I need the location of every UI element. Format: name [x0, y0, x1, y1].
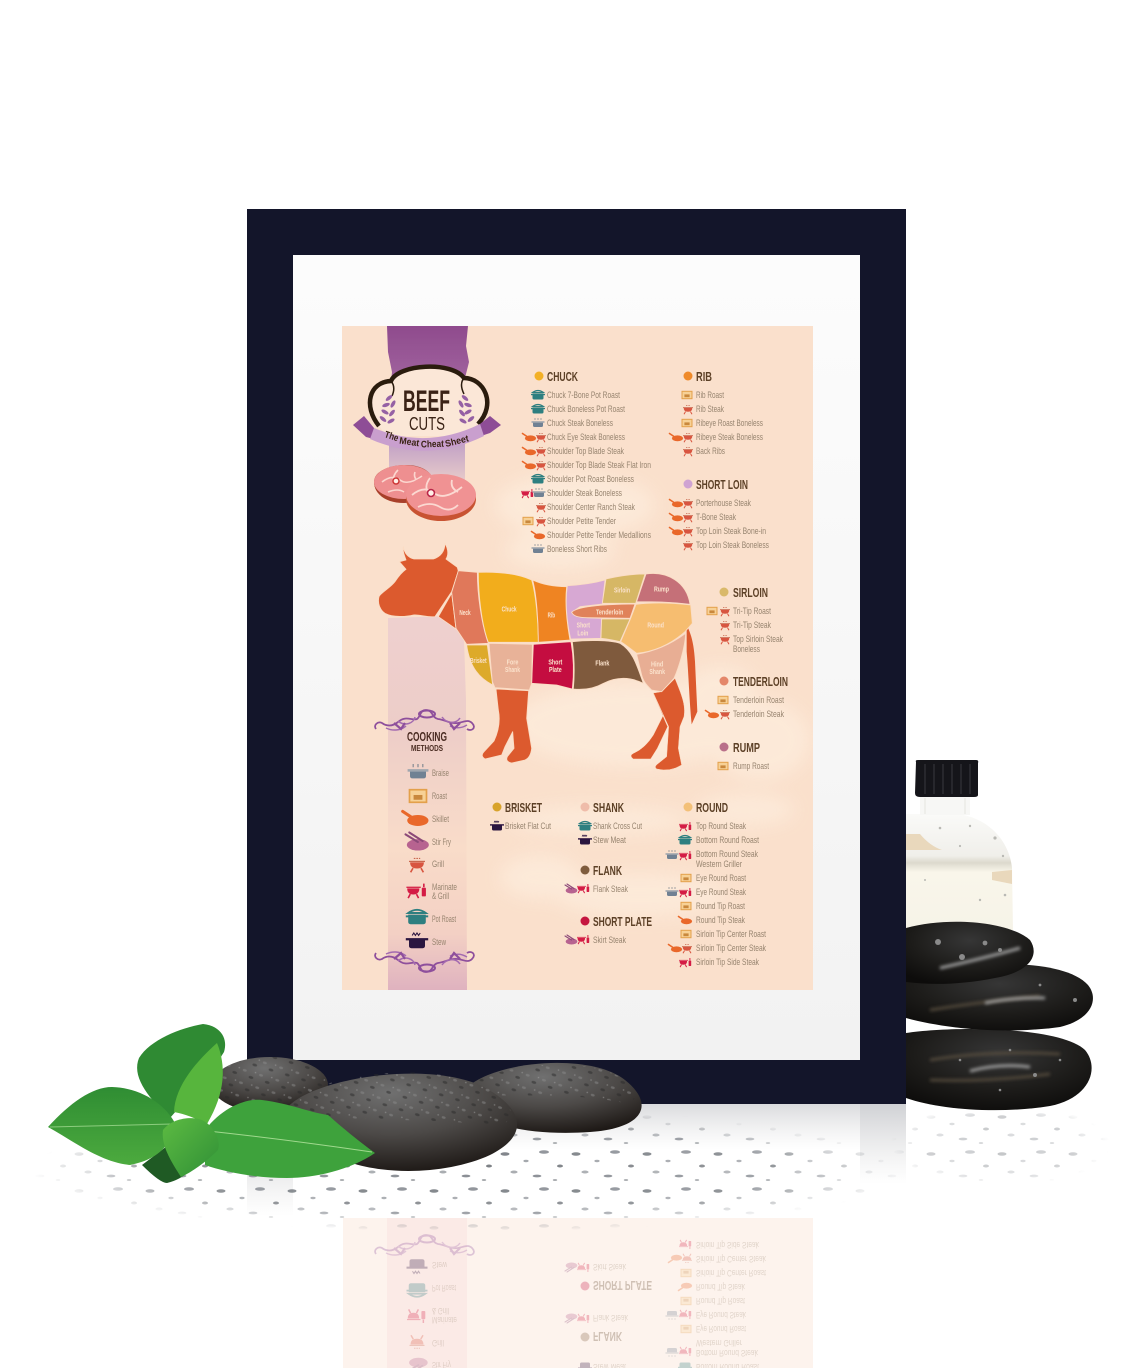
cut labels: Fore: [507, 657, 518, 666]
row: Ribeye Roast Boneless: [696, 418, 763, 429]
section: tenderloin: [706, 674, 788, 720]
row: Shoulder Top Blade Steak: [547, 446, 624, 457]
row: Shoulder Center Ranch Steak: [547, 502, 635, 513]
section: short loin: [670, 477, 769, 551]
cut labels: Shank: [649, 667, 666, 676]
ribbon text: [383, 429, 471, 450]
purple top band: [387, 326, 469, 392]
leaf: left: [48, 1087, 176, 1165]
row: Shank Cross Cut: [593, 821, 642, 832]
heading: shank: SHANK: [593, 800, 624, 815]
cow tail: [687, 625, 697, 724]
white mat: [293, 255, 860, 1060]
method: marinate and grill: Marinate: [432, 882, 457, 893]
leaf: small center: [163, 1118, 219, 1177]
short loin cut: [566, 580, 605, 639]
row: Sirloin Tip Side Steak: [696, 957, 759, 968]
row: Rib Steak: [696, 404, 724, 415]
section: sirloin: [707, 585, 783, 655]
row: Bottom Round Roast: [696, 835, 759, 846]
method: marinate and grill: [406, 882, 457, 902]
cut labels: Rump: [654, 585, 669, 594]
hind shank cut: [637, 633, 686, 692]
row: Chuck Boneless Pot Roast: [547, 404, 625, 415]
sirloin cut: [601, 574, 645, 642]
method: pot roast: [406, 910, 456, 925]
neck cut: [452, 571, 488, 644]
ribbon text: Cheat: [421, 439, 445, 450]
reflection of the poster: Stew: [432, 1259, 447, 1270]
cut labels: Short: [548, 658, 563, 667]
reflection of the poster: Sirloin Tip Side Steak: [696, 1239, 759, 1250]
method: stew: Stew: [432, 937, 446, 948]
row: Eye Round Steak: [696, 887, 746, 898]
CUTS: CUTS: [409, 414, 445, 434]
row: Top Round Steak: [696, 821, 746, 832]
cow diagram: [379, 543, 697, 770]
row: Chuck Steak Boneless: [547, 418, 613, 429]
bottle cap: [915, 760, 978, 797]
water droplets on table: [43, 1113, 1103, 1230]
method: roast: [410, 790, 447, 802]
ribbon text: Sheet: [444, 433, 471, 450]
row: [522, 432, 625, 443]
row: [666, 849, 758, 870]
ribbon text: The: [383, 429, 400, 444]
row: [532, 544, 607, 555]
section: short plate: [565, 914, 652, 946]
icon: steaks: [374, 465, 476, 521]
table reflection of frame: [247, 1104, 906, 1216]
cut labels: Shank: [505, 665, 521, 674]
fore shank cut: [489, 643, 532, 690]
cut labels: Brisket: [470, 656, 487, 665]
heading: short loin: SHORT LOIN: [696, 477, 748, 492]
reflection of the poster: Eye Round Steak: [696, 1309, 746, 1320]
row: Chuck Eye Steak Boneless: [547, 432, 625, 443]
ornament: top: [375, 710, 474, 730]
method: grill: [409, 858, 444, 872]
reflection of the poster: Eye Round Roast: [696, 1323, 746, 1334]
row: Eye Round Roast: [696, 873, 746, 884]
row: Top Loin Steak Boneless: [696, 540, 769, 551]
poster background: [342, 326, 813, 990]
rib cut: [533, 580, 570, 642]
row: Back Ribs: [696, 446, 725, 457]
cow legs: [482, 678, 684, 770]
reflection of the poster: Skirt Steak: [593, 1261, 626, 1272]
row: Boneless: [733, 644, 760, 655]
ribbon text: Meat: [399, 436, 421, 449]
method: skillet: Skillet: [432, 814, 449, 825]
bottle: [906, 760, 1013, 930]
section: flank: [565, 863, 628, 895]
cut labels: Short: [577, 620, 590, 629]
row: Boneless Short Ribs: [547, 544, 607, 555]
row: Porterhouse Steak: [696, 498, 751, 509]
laurel left: [379, 394, 397, 425]
row: Top Sirloin Steak: [733, 634, 783, 645]
row: [532, 418, 613, 429]
cut labels: Chuck: [502, 605, 517, 614]
cut labels: Round: [647, 620, 664, 629]
row: [681, 929, 766, 940]
row: Shoulder Pot Roast Boneless: [547, 474, 634, 485]
ribbon: [353, 416, 501, 451]
row: Rump Roast: [733, 761, 769, 772]
row: [531, 390, 620, 401]
heading: chuck: CHUCK: [547, 369, 578, 384]
reflection of the poster: & Grill: [432, 1305, 449, 1316]
heading: round: [684, 800, 728, 815]
heading: rib: RIB: [696, 369, 712, 384]
leaf: dark lower: [142, 1140, 191, 1183]
neck underside: [438, 593, 456, 629]
method: grill: Grill: [432, 859, 444, 870]
bottle droplets: [924, 825, 1006, 901]
cut labels: Hind: [651, 660, 663, 669]
row: Round Tip Roast: [696, 901, 745, 912]
row: [531, 474, 634, 485]
reflection of the poster: FLANK: [593, 1329, 622, 1344]
row: Tri-Tip Steak: [733, 620, 771, 631]
row: Sirloin Tip Center Steak: [696, 943, 766, 954]
section: shank: [578, 800, 642, 846]
row: Brisket Flat Cut: [505, 821, 551, 832]
reflection of the poster: Sirloin Tip Center Roast: [696, 1267, 766, 1278]
row: Bottom Round Steak: [696, 849, 758, 860]
section: rib: [670, 369, 763, 457]
reflection of the poster: SHORT PLATE: [593, 1278, 652, 1293]
cut labels: Tenderloin: [596, 607, 624, 616]
band fade under logo: [389, 444, 465, 500]
reflection of the poster: Sirloin Tip Center Steak: [696, 1253, 766, 1264]
laurel right: [457, 394, 475, 425]
row: [666, 887, 746, 898]
badge interior: [370, 368, 487, 436]
row: Shoulder Top Blade Steak Flat Iron: [547, 460, 651, 471]
leaves: [48, 1024, 375, 1183]
method: stir fry: [406, 832, 451, 851]
section: chuck: [521, 369, 651, 555]
row: Top Loin Steak Bone-in: [696, 526, 766, 537]
panel: cooking methods: [375, 710, 474, 972]
reflection of the poster: Flank Steak: [593, 1312, 628, 1323]
heading: rump: RUMP: [733, 740, 760, 755]
reflection of the poster: Marinate: [432, 1314, 457, 1325]
row: [679, 821, 746, 832]
reflection of the poster: Grill: [432, 1337, 444, 1348]
row: Shoulder Petite Tender: [547, 516, 616, 527]
heading: flank: FLANK: [593, 863, 622, 878]
cut labels: [459, 585, 669, 676]
tenderloin cut: [572, 604, 635, 618]
frame: [247, 209, 906, 1104]
row: [532, 530, 651, 541]
section: round: [666, 800, 766, 968]
row: [521, 488, 622, 499]
heading: chuck: [534, 369, 578, 384]
row: Shoulder Steak Boneless: [547, 488, 622, 499]
row: [681, 873, 746, 884]
chuck cut: [478, 572, 538, 642]
rump cut: [637, 574, 690, 604]
method: stir fry: Stir Fry: [432, 837, 451, 848]
row: [536, 502, 635, 513]
row: Tenderloin Roast: [733, 695, 784, 706]
row: Skirt Steak: [593, 935, 626, 946]
heading: cooking methods: [407, 730, 447, 753]
reflection of the poster: [343, 1218, 813, 1368]
leaf: right: [205, 1100, 375, 1178]
reflection of the poster: Round Tip Steak: [696, 1281, 745, 1292]
method: skillet: [403, 811, 449, 826]
brisket cut: [467, 645, 493, 685]
method: marinate and grill: & Grill: [432, 891, 449, 902]
leaf: upright center: [174, 1043, 223, 1124]
ornament: bottom: [375, 952, 474, 972]
heading: tenderloin: TENDERLOIN: [733, 674, 788, 689]
reflection of the poster: Western Griller: [696, 1337, 742, 1348]
row: Shoulder Petite Tender Medallions: [547, 530, 651, 541]
row: [678, 915, 745, 926]
row: Tri-Tip Roast: [733, 606, 771, 617]
left stones: [212, 1057, 642, 1171]
row: [678, 835, 759, 846]
cut labels: Loin: [577, 628, 589, 637]
cut labels: Flank: [595, 658, 610, 667]
heading: short plate: SHORT PLATE: [593, 914, 652, 929]
heading: round: ROUND: [696, 800, 728, 815]
section: brisket: [490, 800, 551, 832]
flank cut: [572, 641, 643, 689]
method: stew: [406, 933, 446, 948]
round cut: [621, 603, 692, 653]
row: Sirloin Tip Center Roast: [696, 929, 766, 940]
row: [531, 404, 625, 415]
reflection of the poster: Bottom Round Steak: [696, 1347, 758, 1358]
row: Ribeye Steak Boneless: [696, 432, 763, 443]
cut labels: Neck: [459, 608, 471, 617]
heading: sirloin: SIRLOIN: [733, 585, 768, 600]
poster: [342, 326, 813, 990]
row: [679, 957, 759, 968]
row: [522, 460, 651, 471]
row: Round Tip Steak: [696, 915, 745, 926]
heading: brisket: BRISKET: [505, 800, 542, 815]
heading: cooking methods: METHODS: [411, 743, 443, 753]
row: [681, 901, 745, 912]
short plate cut: [532, 642, 573, 689]
cut labels: Plate: [549, 665, 562, 674]
lower pink band: [388, 616, 467, 990]
leaf: top back: [137, 1024, 225, 1118]
reflection of the poster: Round Tip Roast: [696, 1295, 745, 1306]
pale watercolor blotches: [495, 473, 810, 917]
row: Rib Roast: [696, 390, 724, 401]
right stone stack: [906, 922, 1093, 1110]
row: Western Griller: [696, 859, 742, 870]
scalloped badge outline: [370, 367, 487, 426]
cow head: [379, 543, 458, 617]
method: pot roast: Pot Roast: [432, 914, 456, 925]
row: Tenderloin Steak: [733, 709, 784, 720]
row: [522, 446, 624, 457]
cut labels: Rib: [548, 610, 555, 619]
row: [668, 943, 766, 954]
row: [523, 516, 616, 527]
row: [720, 634, 783, 655]
logo: beef cuts: [353, 367, 501, 451]
heading: cooking methods: COOKING: [407, 730, 447, 744]
row: Stew Meat: [593, 835, 626, 846]
row: T-Bone Steak: [696, 512, 736, 523]
method: roast: Roast: [432, 791, 447, 802]
method: braise: [408, 764, 449, 779]
section: rump: [718, 740, 769, 772]
method: braise: Braise: [432, 768, 449, 779]
cut labels: Sirloin: [614, 585, 630, 594]
row: Flank Steak: [593, 884, 628, 895]
row: Chuck 7-Bone Pot Roast: [547, 390, 620, 401]
reflection of the poster: Pot Roast: [432, 1282, 456, 1293]
BEEF: BEEF: [403, 385, 450, 418]
